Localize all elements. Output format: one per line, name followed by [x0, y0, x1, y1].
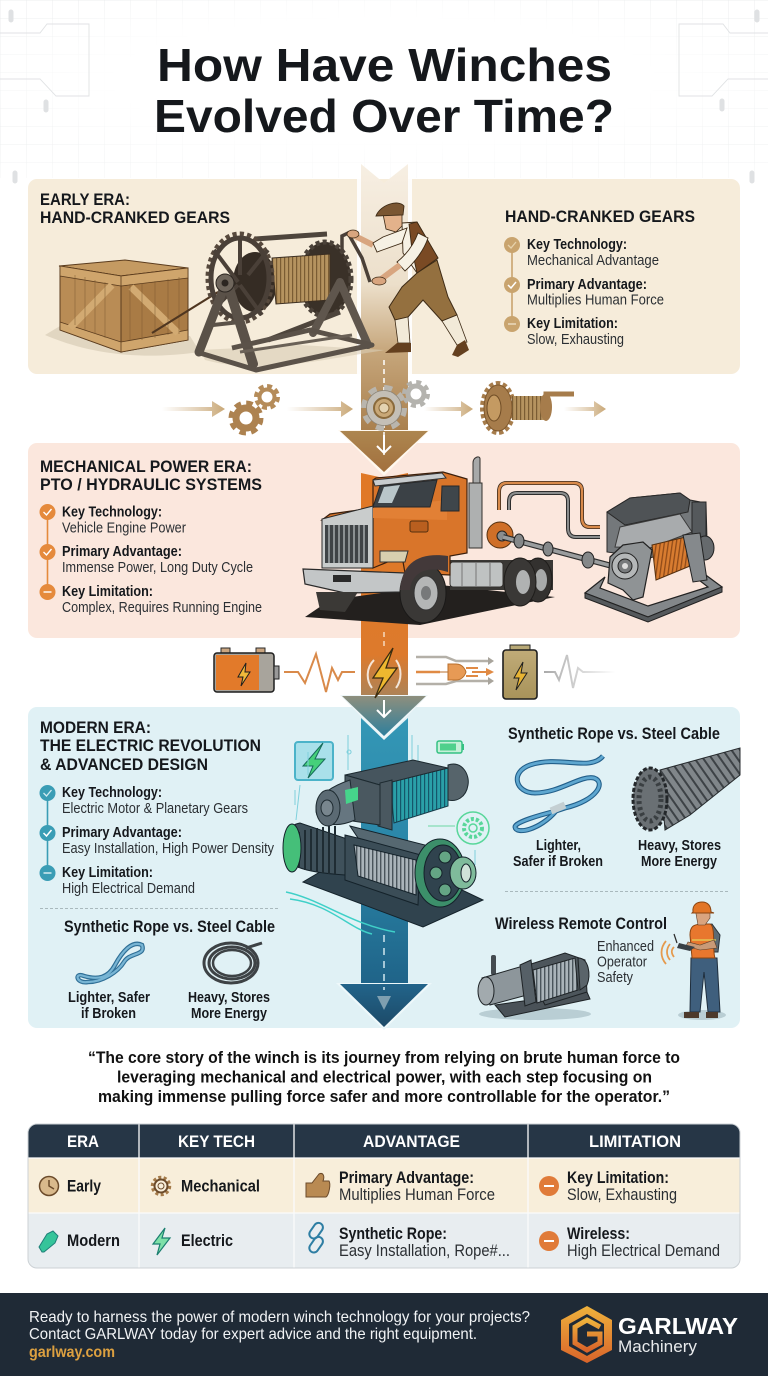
quote: leveraging mechanical and electrical power, with each step focusing on — [117, 1068, 652, 1086]
comparison: synthetic rope vs steel cable (right): More Energy — [641, 853, 718, 870]
footer call to action: Ready to harness the power of modern winch technology for your projects? — [29, 1309, 530, 1326]
icon: minus circle — [539, 1176, 559, 1196]
table header — [67, 1132, 681, 1151]
logo — [561, 1306, 738, 1363]
footer — [0, 1293, 768, 1376]
gear transition row — [162, 382, 606, 433]
icon: battery — [437, 741, 464, 753]
row: early: Multiplies Human Force — [339, 1186, 495, 1204]
illustration: worker cranking — [347, 203, 469, 357]
icon: synthetic rope loop — [515, 756, 603, 831]
footer call to action: Contact GARLWAY today for expert advice and the right equipment. — [29, 1326, 477, 1343]
text block: mechanical power list: Primary Advantage: — [62, 543, 182, 560]
row: early — [40, 1169, 677, 1204]
wireless remote control block: Safety — [597, 970, 634, 986]
text block: mechanical power list: Vehicle Engine Power — [62, 520, 186, 536]
text block: modern era list: Primary Advantage: — [62, 824, 182, 841]
comparison: synthetic rope vs steel cable (right): Lighter, — [536, 837, 581, 854]
table header: ERA — [67, 1132, 99, 1151]
comparison: synthetic rope vs steel cable (left): More Energy — [191, 1005, 268, 1022]
text block: hand-cranked gears list: Slow, Exhausting — [527, 332, 624, 348]
icon: thumbs up — [306, 1173, 330, 1197]
title: How Have Winches — [157, 39, 612, 91]
wireless remote control block — [478, 902, 726, 1020]
heading: modern era — [40, 719, 261, 774]
arrow: central timeline — [336, 164, 432, 1030]
icon: gear circle — [457, 812, 489, 844]
icon: lightning box — [295, 742, 333, 780]
text block: mechanical power list: Complex, Requires Running Engine — [62, 600, 262, 616]
illustration: hydraulic hoses and driveshaft — [499, 483, 612, 568]
text block: hand-cranked gears list: Primary Advantage: — [527, 276, 647, 293]
heading: modern era: & ADVANCED DESIGN — [40, 756, 208, 774]
icon: lightning — [153, 1228, 170, 1255]
text block: mechanical power list: Key Limitation: — [62, 583, 153, 600]
row: modern: Easy Installation, Rope#... — [339, 1242, 510, 1260]
heading: mechanical power era: MECHANICAL POWER ERA: — [40, 458, 252, 476]
wireless remote control block: Wireless Remote Control — [495, 915, 667, 933]
comparison: synthetic rope vs steel cable (right): Safer if Broken — [513, 853, 603, 870]
row: modern: Modern — [67, 1232, 120, 1250]
text block: mechanical power list: Key Technology: — [62, 504, 162, 520]
icon: plug — [39, 1231, 58, 1252]
heading: mechanical power era — [40, 458, 262, 494]
comparison table — [28, 1124, 740, 1268]
quote: making immense pulling force safer and more controllable for the operator.” — [98, 1088, 670, 1106]
illustration: engine and PTO winch — [585, 493, 722, 622]
icon: clock — [40, 1176, 58, 1196]
row: early: Slow, Exhausting — [567, 1186, 677, 1204]
title: Evolved Over Time? — [154, 90, 614, 142]
text block: hand-cranked gears list — [504, 208, 695, 348]
background grid — [0, 0, 768, 181]
footer call to action: garlway.com — [29, 1344, 115, 1361]
icon: steel cable — [633, 748, 740, 830]
text block: modern era list: Key Limitation: — [62, 864, 153, 881]
icon: chain link — [308, 1221, 325, 1254]
panel: modern era background — [28, 707, 740, 1028]
illustration: hand-cranked winch — [199, 233, 385, 370]
logo: Machinery — [618, 1337, 697, 1356]
title — [154, 39, 614, 142]
electric transition row — [162, 645, 615, 699]
icon: remote-controlled winch — [478, 953, 591, 1020]
row: modern: Electric — [181, 1232, 233, 1250]
illustration: wooden crate — [45, 260, 218, 356]
footer call to action — [29, 1309, 530, 1361]
text block: hand-cranked gears list: Multiplies Human Force — [527, 292, 664, 308]
comparison: synthetic rope vs steel cable (right): Synthetic Rope vs. Steel Cable — [508, 725, 720, 743]
comparison: synthetic rope vs steel cable (left): Heavy, Stores — [188, 989, 270, 1006]
row: modern: Wireless: — [567, 1225, 630, 1243]
text block: hand-cranked gears list: Mechanical Advantage — [527, 253, 659, 269]
comparison: synthetic rope vs steel cable (left): Synthetic Rope vs. Steel Cable — [64, 918, 275, 936]
text block: modern era list: Electric Motor & Planetary Gears — [62, 801, 248, 817]
table header: ADVANTAGE — [363, 1132, 460, 1151]
row: modern: High Electrical Demand — [567, 1242, 720, 1260]
heading: early era — [40, 191, 230, 227]
text block: modern era list: Easy Installation, High Power Density — [62, 841, 275, 857]
quote — [88, 1049, 680, 1106]
icon: gear — [152, 1178, 170, 1194]
icon: small synthetic rope — [78, 944, 143, 982]
panel: mechanical era background — [28, 443, 740, 638]
heading: modern era: MODERN ERA: — [40, 719, 151, 737]
row: modern: Synthetic Rope: — [339, 1225, 447, 1243]
row: early: Mechanical — [181, 1178, 260, 1196]
row: early: Key Limitation: — [567, 1169, 669, 1187]
quote: “The core story of the winch is its journey from relying on brute human force to — [88, 1049, 680, 1067]
comparison: synthetic rope vs steel cable (left) — [64, 918, 275, 1022]
text block: modern era list: High Electrical Demand — [62, 881, 195, 897]
row: modern — [39, 1221, 720, 1260]
table header: KEY TECH — [178, 1132, 255, 1151]
text block: hand-cranked gears list: Key Technology: — [527, 236, 627, 253]
table header: LIMITATION — [589, 1132, 681, 1151]
text block: mechanical power list: Immense Power, Long Duty Cycle — [62, 560, 253, 576]
comparison: synthetic rope vs steel cable (left): Lighter, Safer — [68, 989, 150, 1006]
text block: modern era list: Key Technology: — [62, 784, 162, 801]
row: early: Primary Advantage: — [339, 1169, 474, 1187]
wireless remote control block: Enhanced — [597, 939, 654, 955]
text block: mechanical power list — [40, 504, 262, 616]
icon: worker with remote — [674, 902, 726, 1020]
heading: early era: HAND-CRANKED GEARS — [40, 209, 230, 227]
comparison: synthetic rope vs steel cable (right) — [508, 725, 740, 870]
comparison: synthetic rope vs steel cable (right): Heavy, Stores — [638, 837, 721, 854]
text block: modern era list — [40, 784, 275, 897]
heading: mechanical power era: PTO / HYDRAULIC SYSTEMS — [40, 476, 262, 494]
panel: early era background — [28, 179, 740, 374]
illustration: modern electric winches — [283, 735, 489, 934]
comparison: synthetic rope vs steel cable (left): if Broken — [81, 1005, 136, 1022]
wireless remote control block: Operator — [597, 954, 647, 970]
text block: hand-cranked gears list: HAND-CRANKED GEARS — [505, 208, 695, 226]
text block: hand-cranked gears list: Key Limitation: — [527, 315, 618, 332]
icon: minus circle — [539, 1231, 559, 1251]
heading: modern era: THE ELECTRIC REVOLUTION — [40, 737, 261, 755]
heading: early era: EARLY ERA: — [40, 191, 130, 209]
icon: signal waves — [662, 941, 674, 964]
logo: GARLWAY — [618, 1313, 738, 1339]
icon: small steel cable coil — [204, 943, 262, 983]
row: early: Early — [67, 1178, 102, 1196]
illustration: orange truck — [303, 457, 555, 625]
